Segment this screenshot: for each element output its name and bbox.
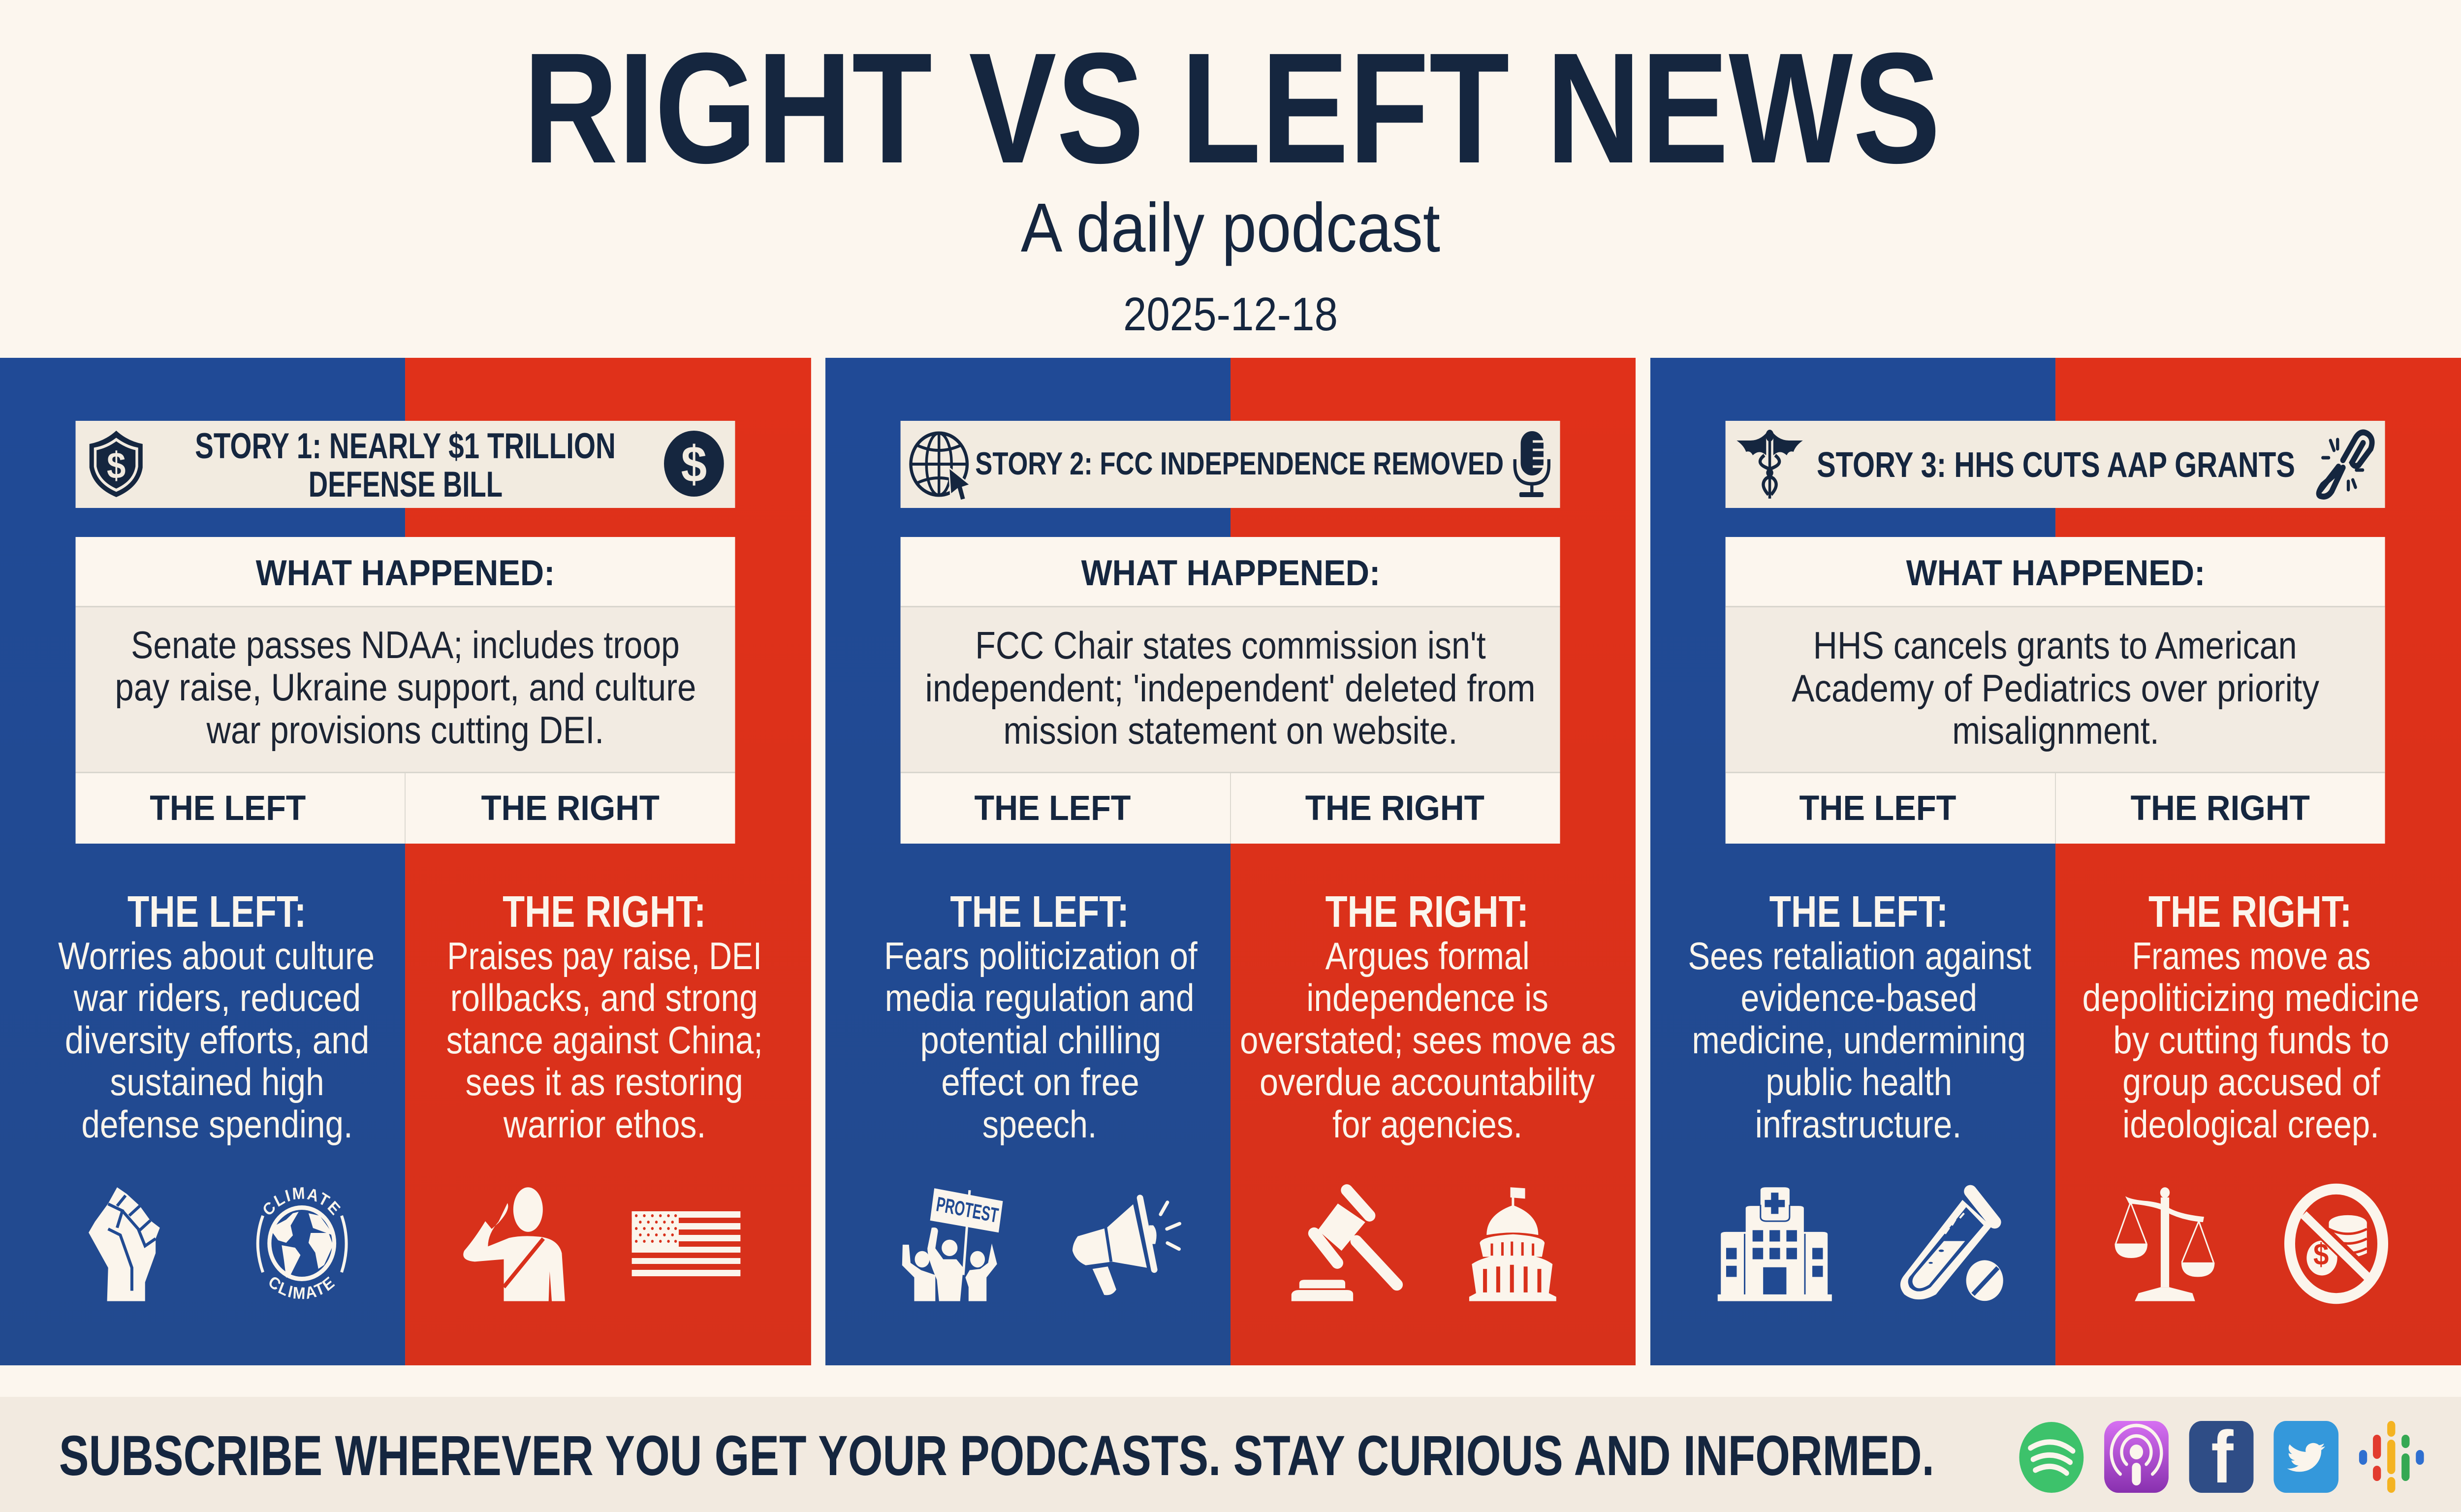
icon: dollar coin bbox=[664, 431, 724, 497]
subtitle: A daily podcast bbox=[1021, 189, 1440, 266]
panel background right bbox=[405, 358, 811, 1365]
story 1 heading bbox=[195, 426, 616, 504]
panel background left bbox=[1650, 358, 2055, 1365]
icon: shield with dollar: $ bbox=[107, 445, 126, 487]
story 1 heading: STORY 1: NEARLY $1 TRILLION bbox=[195, 426, 616, 466]
tab: the left: THE LEFT bbox=[1799, 789, 1956, 828]
what happened text bbox=[925, 624, 1536, 752]
panel: story 3: $ bbox=[2313, 1237, 2329, 1272]
panel background left bbox=[825, 358, 1230, 1365]
right view text: Frames move as bbox=[2132, 935, 2370, 977]
left view text: infrastructure. bbox=[1755, 1103, 1961, 1146]
left view text: effect on free bbox=[941, 1061, 1139, 1103]
icon: microphone bbox=[1515, 431, 1549, 497]
call to action: SUBSCRIBE WHEREVER YOU GET YOUR PODCASTS. STAY CURIOUS AND INFORMED. bbox=[59, 1424, 1934, 1487]
panel: story 1 bbox=[0, 358, 811, 1365]
what happened card bbox=[1726, 537, 2385, 844]
what happened card bbox=[901, 537, 1560, 844]
icon: scales of justice bbox=[2114, 1187, 2214, 1301]
right view text bbox=[2082, 887, 2420, 1146]
icon: spotify bbox=[2019, 1422, 2083, 1493]
story 1 heading: DEFENSE BILL bbox=[309, 464, 503, 504]
icon: dollar coin: $ bbox=[681, 436, 707, 493]
title: RIGHT VS LEFT NEWS bbox=[523, 20, 1941, 196]
right view text: for agencies. bbox=[1332, 1103, 1522, 1146]
panel background left bbox=[0, 358, 405, 1365]
right view text: depoliticizing medicine bbox=[2082, 976, 2420, 1019]
icon: caduceus bbox=[1736, 430, 1803, 499]
right view text: sees it as restoring bbox=[466, 1061, 743, 1103]
left view text: THE LEFT: bbox=[1769, 887, 1948, 937]
icon: facebook bbox=[2189, 1416, 2253, 1498]
icon: no money sign bbox=[2290, 1189, 2383, 1298]
right view text: THE RIGHT: bbox=[1325, 887, 1529, 937]
tab: the right: THE RIGHT bbox=[481, 789, 660, 828]
story 1 header bar bbox=[76, 421, 735, 508]
icon: twitter bbox=[2273, 1421, 2338, 1493]
panel background right bbox=[1230, 358, 1636, 1365]
what happened text: mission statement on website. bbox=[1004, 709, 1457, 752]
panel: story 2 bbox=[825, 358, 1636, 1365]
left view text: sustained high bbox=[110, 1061, 324, 1103]
icon: globe with cursor bbox=[911, 433, 970, 501]
right view text bbox=[1240, 887, 1616, 1146]
right view text bbox=[446, 887, 763, 1146]
what happened text: HHS cancels grants to American bbox=[1813, 624, 2297, 667]
icon: apple podcasts bbox=[2104, 1421, 2169, 1493]
tab: the right: THE RIGHT bbox=[2131, 789, 2310, 828]
icon: climate globe bbox=[256, 1187, 348, 1299]
story 3 heading: STORY 3: HHS CUTS AAP GRANTS bbox=[1817, 445, 2295, 485]
story 2 header bar bbox=[901, 421, 1560, 508]
left view text: defense spending. bbox=[81, 1103, 353, 1146]
what happened heading: WHAT HAPPENED: bbox=[1906, 553, 2205, 593]
date: 2025-12-18 bbox=[1123, 288, 1338, 341]
left view text bbox=[58, 887, 375, 1146]
what happened text: pay raise, Ukraine support, and culture bbox=[115, 666, 696, 709]
left view text: THE LEFT: bbox=[950, 887, 1129, 937]
icon: megaphone bbox=[1073, 1198, 1180, 1295]
left view text bbox=[884, 887, 1198, 1146]
icon: american flag bbox=[632, 1211, 740, 1276]
left view text: Sees retaliation against bbox=[1688, 935, 2031, 977]
tab: the left: THE LEFT bbox=[150, 789, 306, 828]
what happened heading: WHAT HAPPENED: bbox=[256, 553, 555, 593]
what happened heading: WHAT HAPPENED: bbox=[1081, 553, 1380, 593]
panel background right bbox=[2055, 358, 2461, 1365]
icon: facebook: f bbox=[2211, 1416, 2234, 1498]
what happened text: war provisions cutting DEI. bbox=[206, 709, 604, 752]
right view text: ideological creep. bbox=[2122, 1103, 2379, 1146]
icon: saluting soldier bbox=[463, 1187, 565, 1301]
icon: protesters with sign: PROTEST bbox=[935, 1193, 1000, 1227]
tab: the right: THE RIGHT bbox=[1305, 789, 1484, 828]
right view text: stance against China; bbox=[446, 1019, 763, 1062]
right view text: overstated; sees move as bbox=[1240, 1019, 1616, 1062]
what happened text bbox=[1792, 624, 2320, 752]
icon: shield with dollar bbox=[90, 431, 143, 497]
what happened text bbox=[115, 624, 696, 752]
left view text: diversity efforts, and bbox=[65, 1019, 369, 1062]
right view text: independence is bbox=[1306, 976, 1548, 1019]
right view text: Argues formal bbox=[1325, 935, 1530, 977]
left view text: war riders, reduced bbox=[73, 976, 361, 1019]
right view text: rollbacks, and strong bbox=[450, 976, 758, 1019]
panel: story 3 bbox=[1650, 358, 2461, 1365]
left view text: evidence-based bbox=[1741, 976, 1977, 1019]
icon: climate globe: CLIMATE bbox=[269, 1276, 335, 1299]
right view text: overdue accountability bbox=[1260, 1061, 1595, 1103]
right view text: by cutting funds to bbox=[2113, 1019, 2390, 1062]
left view text: media regulation and bbox=[885, 976, 1194, 1019]
what happened text: FCC Chair states commission isn't bbox=[975, 624, 1486, 667]
left view text: speech. bbox=[982, 1103, 1097, 1146]
what happened text: independent; 'independent' deleted from bbox=[925, 667, 1536, 710]
what happened text: Senate passes NDAA; includes troop bbox=[131, 624, 680, 666]
icon: hospital bbox=[1718, 1187, 1832, 1301]
left view text: Worries about culture bbox=[58, 935, 375, 977]
icon: climate globe: CLIMATE bbox=[264, 1187, 341, 1216]
left view text: potential chilling bbox=[920, 1019, 1161, 1062]
story 3 header bar bbox=[1726, 421, 2385, 508]
icon: google podcasts bbox=[2363, 1425, 2420, 1488]
left view text: THE LEFT: bbox=[127, 887, 306, 937]
left view text: public health bbox=[1766, 1061, 1952, 1103]
what happened text: misalignment. bbox=[1952, 709, 2159, 752]
right view text: group accused of bbox=[2122, 1061, 2380, 1103]
icon: protesters with sign bbox=[902, 1188, 1003, 1301]
what happened card bbox=[76, 537, 735, 844]
icon: capitol building bbox=[1469, 1187, 1556, 1301]
right view text: THE RIGHT: bbox=[2148, 887, 2352, 937]
what happened text: Academy of Pediatrics over priority bbox=[1792, 667, 2320, 710]
story 2 heading: STORY 2: FCC INDEPENDENCE REMOVED bbox=[975, 446, 1504, 482]
icon: broken chain link bbox=[2319, 432, 2372, 497]
right view text: Praises pay raise, DEI bbox=[447, 935, 762, 977]
icon: test tube and pill bbox=[1900, 1192, 2003, 1301]
left view text: medicine, undermining bbox=[1692, 1019, 2026, 1062]
icon: gavel bbox=[1292, 1190, 1397, 1301]
icon: raised fist bbox=[89, 1187, 160, 1301]
left view text bbox=[1688, 887, 2031, 1146]
tab: the left: THE LEFT bbox=[974, 789, 1131, 828]
left view text: Fears politicization of bbox=[884, 935, 1198, 977]
right view text: THE RIGHT: bbox=[503, 887, 706, 937]
right view text: warrior ethos. bbox=[503, 1103, 706, 1146]
footer banner bbox=[0, 1397, 2461, 1512]
